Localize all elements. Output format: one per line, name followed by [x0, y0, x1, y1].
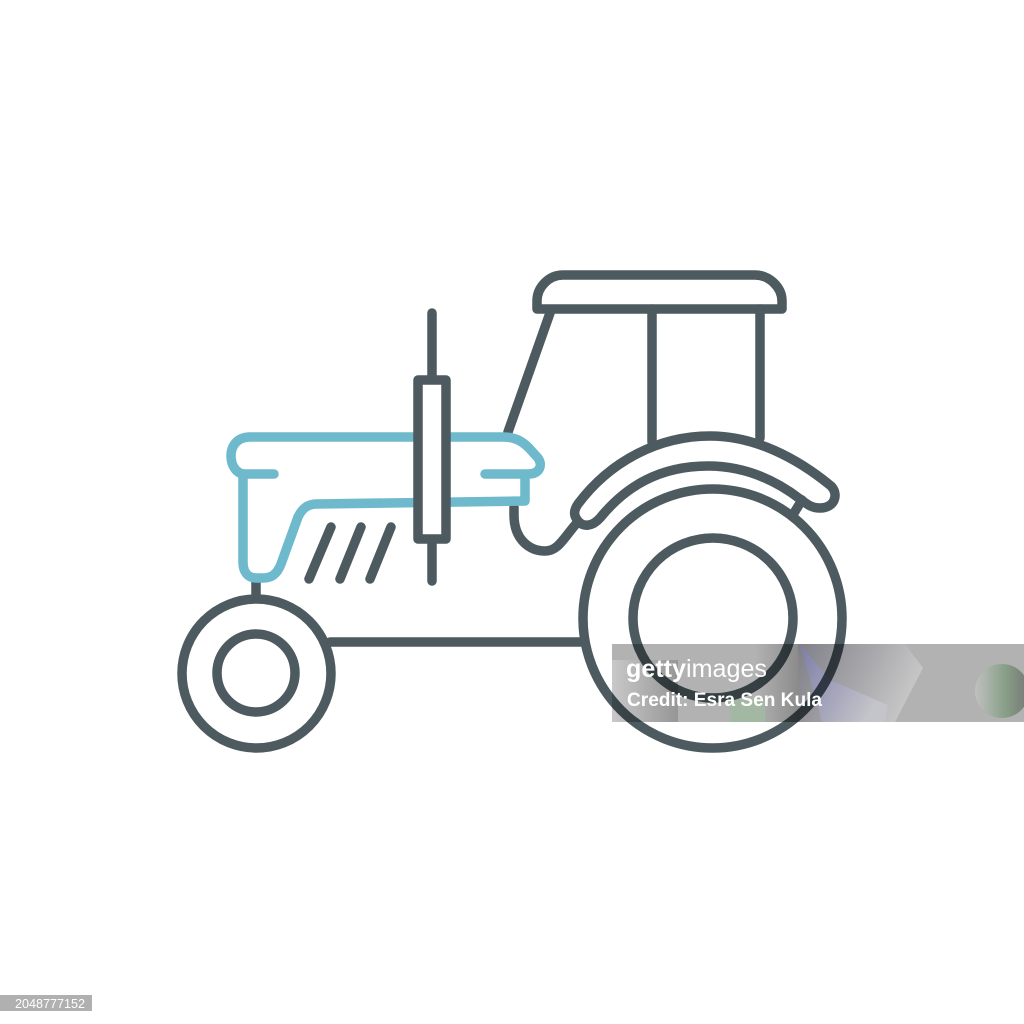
cab roof	[537, 275, 782, 309]
watermark logo text: gettyimages	[626, 655, 767, 683]
cab pillars	[508, 309, 760, 442]
fender bracket	[794, 500, 802, 513]
watermark band	[612, 644, 1024, 722]
radiator slats	[309, 527, 391, 579]
watermark credit text: Credit: Esra Sen Kula	[627, 690, 822, 711]
hood	[231, 437, 540, 578]
hose	[514, 507, 576, 551]
image id tag	[0, 995, 92, 1011]
front strut	[251, 578, 261, 599]
image id tag: 2048777152	[15, 997, 85, 1011]
fender	[575, 436, 835, 525]
icon: tractor	[182, 275, 842, 748]
rear wheel	[583, 489, 842, 748]
front wheel	[182, 599, 331, 748]
exhaust pipe	[418, 313, 446, 581]
axle	[330, 637, 583, 647]
